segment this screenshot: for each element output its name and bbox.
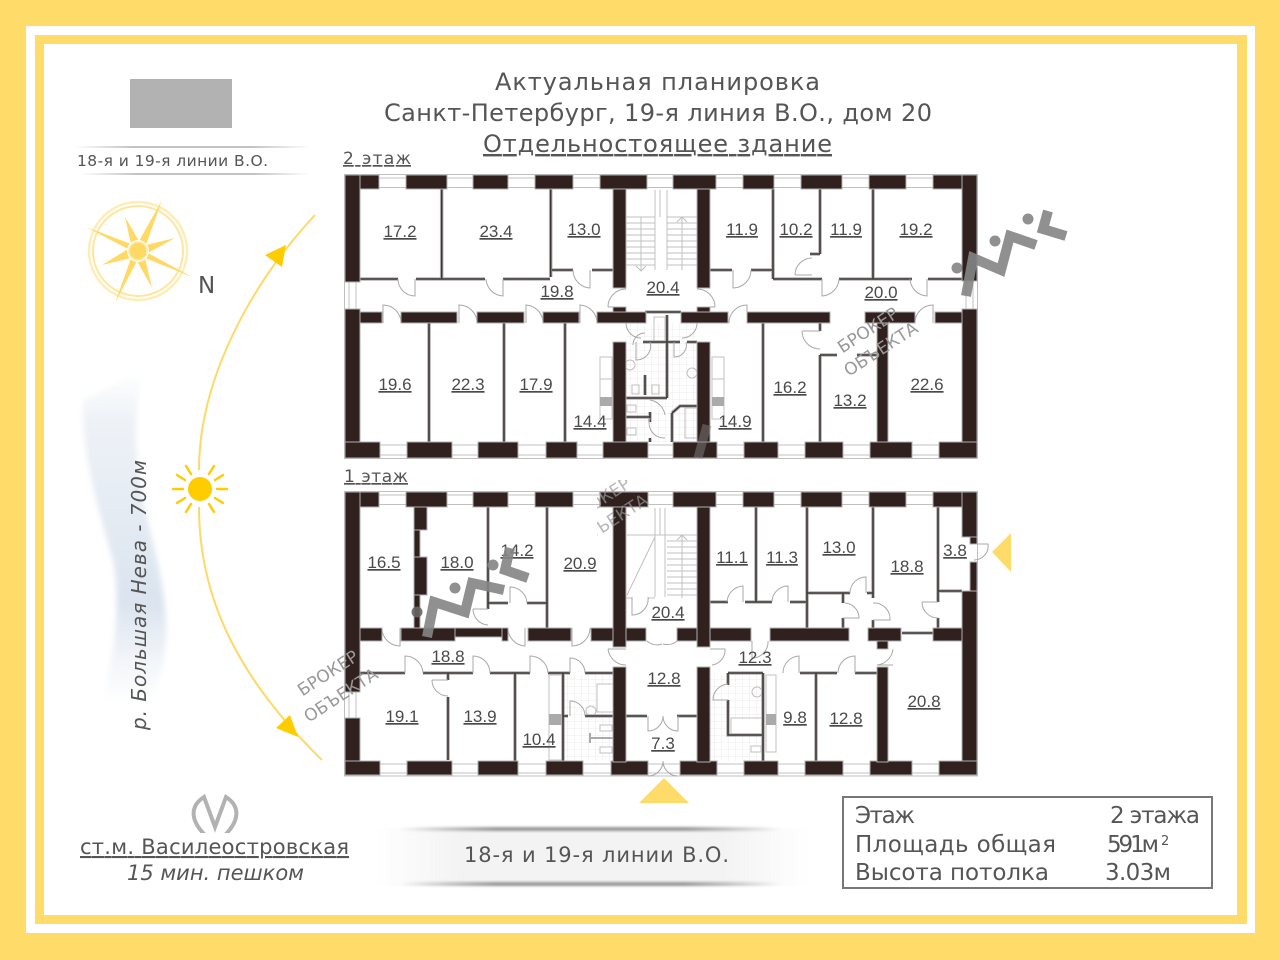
- info box: 591м: [1107, 832, 1159, 858]
- room areas: 22.6: [910, 375, 944, 394]
- room areas: 3.8: [943, 541, 967, 560]
- arrow: main entrance: [639, 778, 689, 803]
- logo placeholder: [130, 79, 232, 128]
- window band: [344, 492, 978, 776]
- info box: [843, 797, 1212, 888]
- road band: [375, 827, 810, 886]
- room areas: 12.3: [738, 648, 772, 667]
- room areas: 19.8: [540, 282, 574, 301]
- info box: 2: [1161, 834, 1169, 849]
- metro label: 15 мин. пешком: [127, 861, 304, 885]
- walls: [345, 175, 977, 458]
- room areas: 19.2: [899, 220, 933, 239]
- window band: [344, 174, 978, 458]
- heading: 2nd floor: 2 этаж: [343, 149, 411, 169]
- room areas: 11.3: [766, 548, 798, 567]
- heading: 1st floor: 1 этаж: [344, 467, 408, 487]
- sun path arc with arrows: [199, 215, 322, 760]
- room areas: 18.8: [890, 557, 924, 576]
- room areas: 16.5: [367, 553, 401, 572]
- bathrooms: [600, 317, 724, 442]
- watermark text right: ОБЪЕКТА: [841, 318, 922, 381]
- watermark text centre: ОБЪЕКТА: [571, 490, 652, 553]
- room areas: 18.0: [440, 553, 474, 572]
- room areas: 16.2: [773, 378, 807, 397]
- room areas: 18.8: [431, 647, 465, 666]
- floor plan: 2nd floor: [344, 174, 978, 458]
- info box: Площадь общая: [855, 832, 1056, 858]
- title: [384, 68, 932, 158]
- room areas: 20.9: [563, 554, 597, 573]
- title: Актуальная планировка: [495, 68, 820, 96]
- floor plan: 1st floor: [344, 492, 988, 776]
- thin partitions: [360, 507, 962, 761]
- room areas: 11.9: [726, 220, 758, 239]
- watermark: faint logo fragment: [698, 425, 707, 458]
- room areas: 23.4: [479, 222, 513, 241]
- room areas: 13.0: [822, 538, 856, 557]
- room areas: 19.6: [378, 375, 412, 394]
- room areas: 13.0: [567, 220, 601, 239]
- room areas: 9.8: [783, 708, 807, 727]
- room areas: 14.2: [500, 541, 534, 560]
- icon: compass: [86, 200, 192, 303]
- room areas: 22.3: [451, 375, 485, 394]
- watermark text right: БРОКЕР: [834, 304, 902, 358]
- icon: metro: [194, 797, 236, 835]
- info box: 2 этажа: [1110, 803, 1200, 829]
- room areas: [378, 220, 944, 431]
- room areas: 12.8: [829, 709, 863, 728]
- room areas: 17.9: [519, 375, 553, 394]
- metro label: [80, 835, 349, 885]
- title: Санкт-Петербург, 19-я линия В.О., дом 20: [384, 99, 932, 127]
- room areas: 14.4: [573, 412, 607, 431]
- room areas: 12.8: [647, 669, 681, 688]
- watermark text centre: [597, 480, 649, 536]
- watermark text left: ОБЪЕКТА: [301, 664, 382, 727]
- watermark: logo lower: [412, 548, 528, 637]
- room areas: 13.2: [833, 391, 867, 410]
- room areas: 20.4: [651, 603, 685, 622]
- river: [83, 370, 166, 705]
- room areas: 14.9: [718, 412, 752, 431]
- room areas: 20.4: [646, 278, 680, 297]
- compass north letter: N: [198, 273, 215, 299]
- room areas: [367, 538, 967, 753]
- walls: [345, 492, 977, 775]
- room areas: 11.1: [716, 548, 748, 567]
- room areas: 17.2: [383, 222, 417, 241]
- river label: р. Большая Нева - 700м: [127, 460, 151, 731]
- room areas: 7.3: [651, 734, 675, 753]
- room areas: 20.0: [864, 283, 898, 302]
- metro label: ст.м. Василеостровская: [80, 835, 349, 859]
- bathrooms: [549, 673, 776, 761]
- room areas: 10.4: [522, 730, 556, 749]
- arrow: side entrance: [992, 533, 1011, 572]
- info box: Высота потолка: [855, 860, 1049, 886]
- info box: 3.03м: [1105, 860, 1171, 886]
- thin partitions: [360, 189, 962, 442]
- watermark text left: БРОКЕР: [294, 647, 362, 701]
- street label top: 18-я и 19-я линии В.О.: [77, 152, 268, 170]
- room areas: 10.2: [779, 220, 813, 239]
- title: Отдельностоящее здание: [483, 130, 832, 158]
- watermark: logo upper: [952, 211, 1066, 296]
- room areas: 11.9: [830, 220, 862, 239]
- road band: 18-я и 19-я линии В.О.: [464, 843, 729, 867]
- stairs: [626, 508, 697, 598]
- doors: [382, 544, 988, 776]
- room areas: 13.9: [463, 707, 497, 726]
- watermark text centre: БРОКЕР: [566, 474, 634, 528]
- stairs: [626, 190, 697, 271]
- room areas: 20.8: [907, 692, 941, 711]
- info box: Этаж: [855, 803, 915, 829]
- room areas: 19.1: [385, 707, 419, 726]
- icon: sun: [173, 466, 227, 512]
- doors: [383, 258, 933, 438]
